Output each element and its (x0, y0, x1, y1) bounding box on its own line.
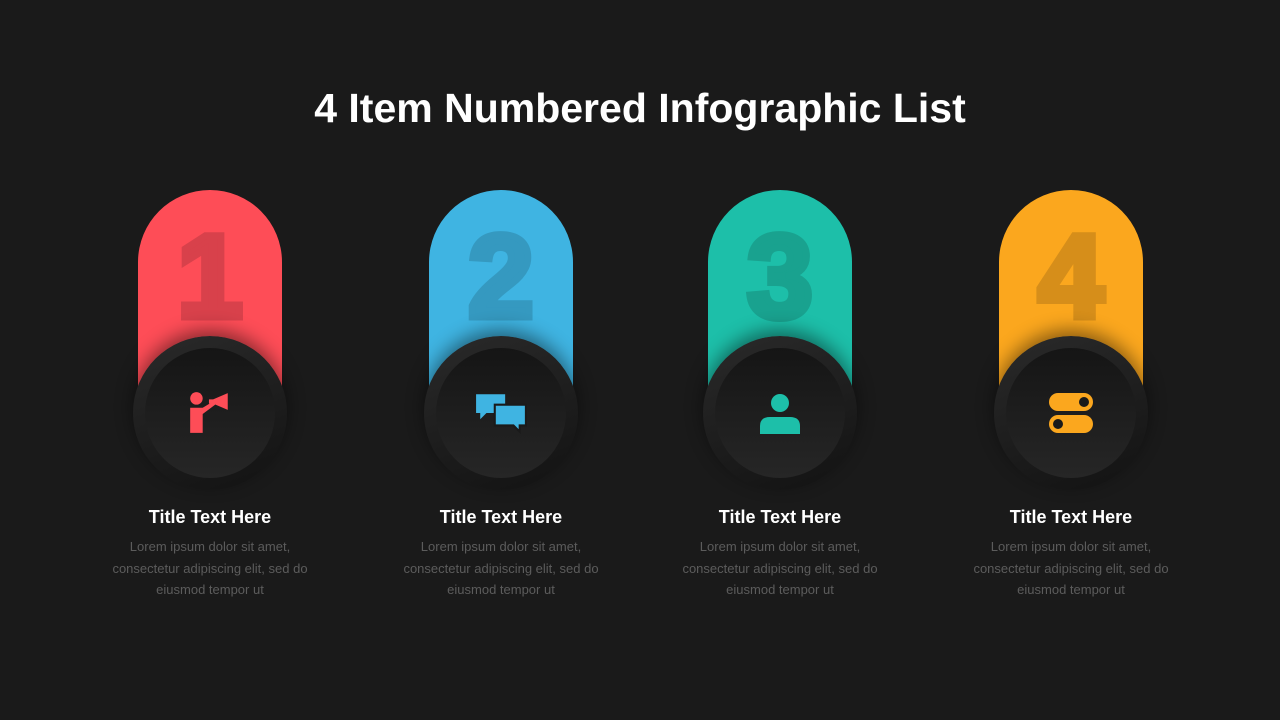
pill 4 (999, 190, 1143, 410)
pill 2: 2 (468, 211, 534, 343)
item 2 (403, 190, 599, 597)
icon circle 4 (994, 336, 1148, 490)
text 1: Lorem ipsum dolor sit amet, (130, 539, 290, 554)
text 3: consectetur adipiscing elit, sed do (682, 560, 878, 576)
text 1: eiusmod tempor ut (156, 582, 264, 597)
text 2: eiusmod tempor ut (447, 582, 555, 597)
heading 2: Title Text Here (440, 507, 562, 527)
title: 4 Item Numbered Infographic List (314, 85, 966, 131)
pill 1 (138, 190, 282, 410)
pill 2 (429, 190, 573, 410)
pill 4: 4 (1038, 211, 1104, 343)
text 4: consectetur adipiscing elit, sed do (973, 560, 1169, 576)
pill 1: 1 (177, 211, 243, 343)
text 2: consectetur adipiscing elit, sed do (403, 560, 599, 576)
text 3: Lorem ipsum dolor sit amet, (700, 539, 860, 554)
text 1 (112, 539, 308, 597)
item 4 (973, 190, 1169, 597)
text 2 (403, 539, 599, 597)
pill 3: 3 (747, 211, 813, 343)
text 4: eiusmod tempor ut (1017, 582, 1125, 597)
pill 3 (708, 190, 852, 410)
icon circle 2 (424, 336, 578, 490)
icon circle 1 (133, 336, 287, 490)
item 3 (682, 190, 878, 597)
text 4 (973, 539, 1169, 597)
icon: megaphone person (190, 392, 228, 433)
heading 3: Title Text Here (719, 507, 841, 527)
text 4: Lorem ipsum dolor sit amet, (991, 539, 1151, 554)
icon circle 3 (703, 336, 857, 490)
icon: chat bubbles (476, 394, 525, 430)
text 2: Lorem ipsum dolor sit amet, (421, 539, 581, 554)
text 3: eiusmod tempor ut (726, 582, 834, 597)
heading 1: Title Text Here (149, 507, 271, 527)
text 3 (682, 539, 878, 597)
item 1 (112, 190, 308, 597)
heading 4: Title Text Here (1010, 507, 1132, 527)
icon: user (760, 394, 800, 434)
icon: toggles (1049, 393, 1093, 433)
text 1: consectetur adipiscing elit, sed do (112, 560, 308, 576)
